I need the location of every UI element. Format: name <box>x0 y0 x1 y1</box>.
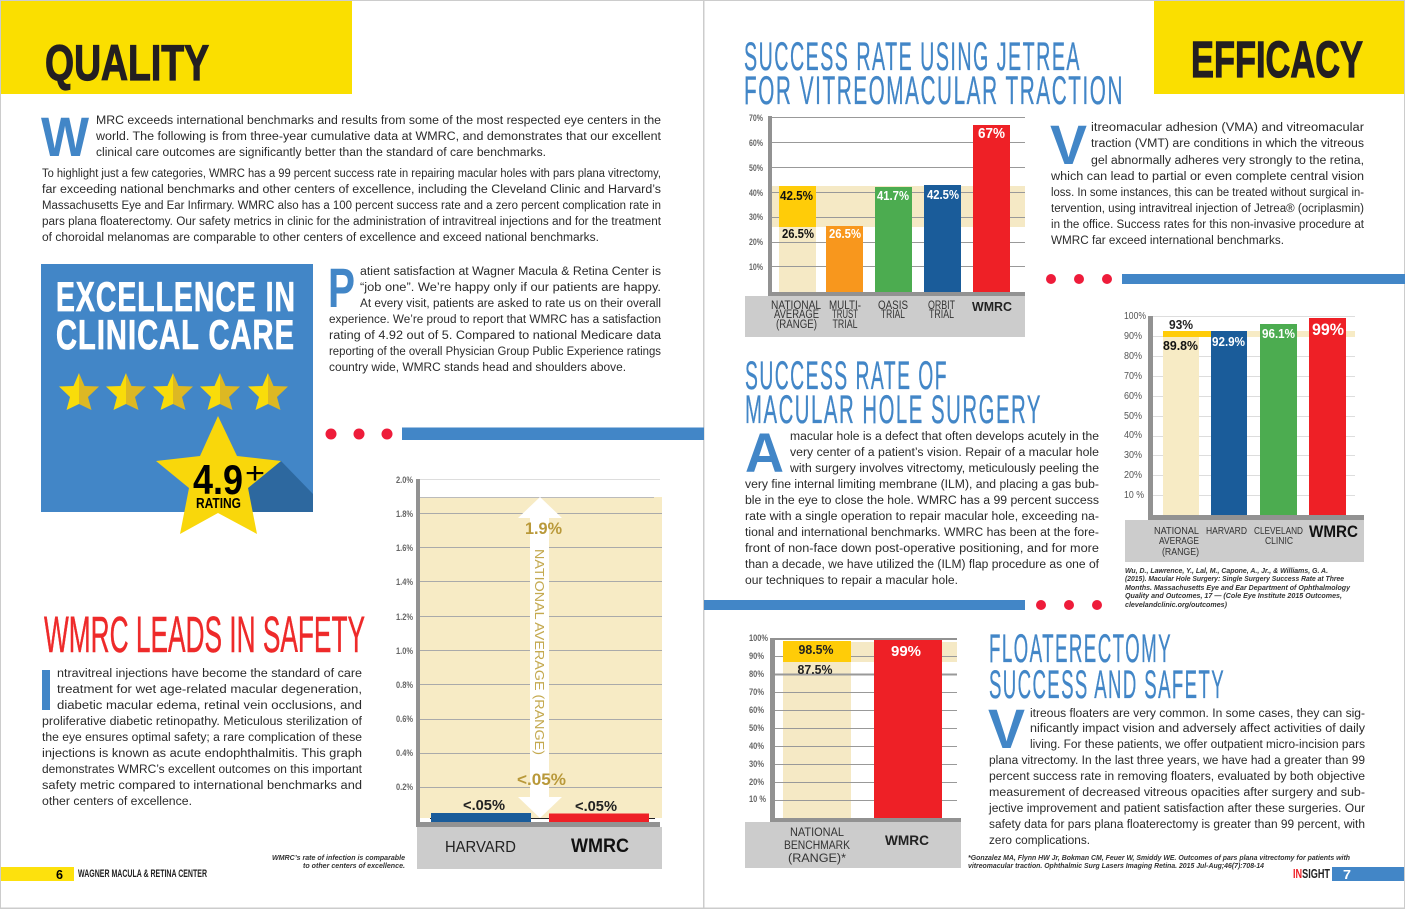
axis labels: 20% <box>1124 470 1142 481</box>
bar: wmrc: 99% <box>1312 320 1344 339</box>
category labels: CLINIC <box>1265 536 1293 547</box>
heading: success rate using jetrea <box>744 35 1124 113</box>
text block: macular hole: very center of a patient’s vision. Repair of a macular hole <box>790 447 1099 459</box>
bar chart: safety: NATIONAL AVERAGE (RANGE) <box>532 549 547 755</box>
references: macular hole: Wu, D., Lawrence, Y., Lal, M., Capone, A., Jr., & Williams, G. A. <box>1125 566 1328 575</box>
bar chart: safety: 1.9% <box>525 519 562 538</box>
text block: safety: safety metric compared to international benchmarks and <box>42 780 362 792</box>
axis labels: 60% <box>749 138 763 148</box>
bar: wmrc <box>973 125 1010 292</box>
heading: floaterectomy success and safety: FLOATERECTOMY <box>989 627 1172 671</box>
text block: macular hole: macular hole is a defect that often develops acutely in the <box>790 431 1099 443</box>
arrow: national average range <box>518 497 562 818</box>
bar: wmrc <box>1309 318 1346 515</box>
axis labels: 60% <box>1124 391 1142 402</box>
axis labels: 10 % <box>1124 490 1144 501</box>
bar: national average range: 42.5% <box>780 189 813 203</box>
bar chart: safety <box>396 475 662 869</box>
icon: large rating star <box>156 416 281 534</box>
category labels: HARVARD <box>1206 526 1247 537</box>
heading: success rate of macular hole surgery: SUCCESS RATE OF <box>745 354 948 398</box>
axis labels: 0.4% <box>396 748 413 758</box>
bar: national benchmark range <box>783 641 851 677</box>
axis labels: 20% <box>749 777 764 787</box>
text block: patient satisfaction <box>328 256 662 374</box>
category labels: AVERAGE <box>1159 536 1199 547</box>
text block: quality intro <box>41 105 662 244</box>
axis labels: 40% <box>1124 430 1142 441</box>
footer: right page: 7 <box>1343 867 1351 882</box>
text block: floaterectomy: nificantly impact vision and adversely affect activities of daily <box>1030 723 1365 735</box>
bar: national average range <box>779 186 816 241</box>
text block: quality intro: To highlight just a few categories, WMRC has a 99 percent success rate in repairing macular holes with pars plana vitrectomy, <box>42 168 661 180</box>
bar: wmrc: 99% <box>891 643 921 660</box>
category labels <box>417 827 662 869</box>
icon: large rating star: RATING <box>196 495 241 512</box>
text block: macular hole <box>745 421 1100 587</box>
text block: quality intro: W <box>41 105 89 168</box>
footer: left page: WAGNER MACULA & RETINA CENTER <box>78 868 207 880</box>
text block: quality intro: of choroidal melanomas are comparable to other centers of excellence and exceed national benchmarks. <box>42 232 599 244</box>
category labels: (RANGE) <box>776 319 817 331</box>
axis labels: 0.2% <box>396 782 413 792</box>
axis labels: 1.6% <box>396 543 413 553</box>
bar: wmrc <box>549 814 649 822</box>
axis labels: 70% <box>749 687 764 697</box>
category labels: WMRC <box>972 299 1013 314</box>
axis labels: 40% <box>749 188 763 198</box>
text block: patient satisfaction: atient satisfaction at Wagner Macula & Retina Center is <box>360 266 661 278</box>
footnote: infection rate <box>272 853 405 870</box>
category labels: TRUST <box>832 309 858 321</box>
bar: multi-trust trial: 26.5% <box>829 227 861 241</box>
bar chart: safety: <.05% <box>517 770 566 789</box>
icon: star shadow <box>248 461 313 512</box>
banner: efficacy <box>1154 1 1404 94</box>
axis labels: 30% <box>749 212 763 222</box>
icon: large rating star: 4.9 <box>193 456 243 503</box>
text block: floaterectomy: plana vitrectomy. In the last three years, we have had a greater than 99 <box>989 755 1365 767</box>
references: macular hole <box>1125 566 1351 609</box>
text block: floaterectomy: itreous floaters are very common. In some cases, they can sig- <box>1030 708 1365 720</box>
text block: macular hole: with surgery involves vitrectomy, meticulously peeling the <box>789 463 1099 475</box>
category labels: WMRC <box>1309 523 1358 541</box>
text block: safety: other centers of excellence. <box>42 796 192 808</box>
axis labels: 100% <box>1124 311 1146 322</box>
category labels: (RANGE)* <box>788 853 847 865</box>
category labels <box>1125 520 1364 562</box>
axis labels: 20% <box>749 237 763 247</box>
category labels: OASIS <box>878 300 908 312</box>
references: macular hole: Months. Massachusetts Eye and Ear Department of Ophthalmology <box>1125 583 1351 592</box>
footnote: floaterectomy reference: vitreomacular traction. Ophthalmic Surg Lasers Imaging Retina. 2015 Jul-Aug;46(7):708-14 <box>968 861 1265 870</box>
bar chart: safety: <.05% <box>463 797 505 814</box>
category labels: NATIONAL <box>790 827 845 839</box>
text block: safety <box>42 668 363 808</box>
bar chart: macular hole surgery <box>1124 311 1364 562</box>
axis labels: 0.6% <box>396 714 413 724</box>
footer: left page <box>1 867 207 882</box>
text block: quality intro: world. The following is from three-year cumulative data at WMRC, and demonstrates that our excellent <box>95 131 662 143</box>
bar: harvard <box>431 813 531 822</box>
bar: wmrc <box>874 640 942 818</box>
heading: excellence in clinical care <box>56 273 296 358</box>
text block: vitreomacular traction: V <box>1050 113 1087 176</box>
text block: floaterectomy: percent success rate in removing floaters, evaluated by both objective <box>989 771 1365 783</box>
text block: patient satisfaction: At every visit, patients are asked to rate us on their overall <box>360 298 661 310</box>
text block: patient satisfaction: rating of 4.92 out of 5. Compared to national Medicare data <box>329 330 662 342</box>
footer: left page: 6 <box>56 867 63 882</box>
axis labels: 100% <box>749 633 768 643</box>
category labels: CLEVELAND <box>1254 526 1303 537</box>
icon: large rating star: + <box>245 457 265 490</box>
bar: oasis trial <box>875 187 912 292</box>
axis labels: 50% <box>749 163 763 173</box>
axis labels: 50% <box>749 723 764 733</box>
axis labels: 1.0% <box>396 646 413 656</box>
bar: orbit trial: 42.5% <box>927 188 959 202</box>
panel: excellence in clinical care <box>41 264 313 534</box>
text block: patient satisfaction: experience. We’re proud to report that WMRC has a satisfaction <box>329 314 661 326</box>
heading: success rate of macular hole surgery <box>745 354 1042 432</box>
footnote: infection rate: WMRC’s rate of infection is comparable <box>272 853 405 862</box>
text block: macular hole: front of non-face down post-operative positioning, and for more <box>745 543 1099 555</box>
axis labels: 60% <box>749 705 764 715</box>
axis labels <box>1124 311 1146 501</box>
bar: multi-trust trial <box>826 226 863 292</box>
bar: cleveland clinic: 96.1% <box>1262 327 1295 341</box>
text block: macular hole: tional and international benchmarks. WMRC has been at the fore- <box>745 527 1099 539</box>
text block: macular hole: A <box>745 421 784 484</box>
bar chart: safety: <.05% <box>575 798 617 815</box>
axis labels: 70% <box>749 113 763 123</box>
text block: vitreomacular traction <box>1050 113 1365 247</box>
text block: vitreomacular traction: traction (VMT) are conditions in which the vitreous <box>1091 138 1364 150</box>
references: macular hole: Quality and Outcomes, 17 — (Cole Eye Institute 2015 Outcomes, <box>1125 591 1342 600</box>
axis labels: 70% <box>1124 371 1142 382</box>
category labels: BENCHMARK <box>784 840 850 852</box>
axis labels: 1.4% <box>396 577 413 587</box>
text block: floaterectomy: jective improvement and patient satisfaction after these surgeries. Our <box>988 803 1365 815</box>
category labels: (RANGE) <box>1162 547 1199 558</box>
text block: macular hole: rate with a single operation to repair macular hole, exceeding na- <box>745 511 1099 523</box>
bar: national average range: 89.8% <box>1163 339 1198 353</box>
references: macular hole: clevelandclinic.org/outcomes) <box>1125 600 1227 609</box>
axis labels: 30% <box>749 759 764 769</box>
text block: safety: injections is known as acute endophthalmitis. This graph <box>42 748 362 760</box>
text block: vitreomacular traction: which can lead to partial or even complete central vision <box>1050 171 1364 183</box>
bar: national average range <box>1163 318 1211 353</box>
axis labels: 2.0% <box>396 475 413 485</box>
category labels <box>745 296 1025 337</box>
text block: vitreomacular traction: loss. In some instances, this can be treated without surgical in- <box>1051 187 1364 199</box>
axis labels: 80% <box>1124 351 1142 362</box>
axis labels <box>749 633 768 804</box>
text block: macular hole: very fine internal limiting membrane (ILM), and placing a gas bub- <box>745 479 1099 491</box>
category labels: WMRC <box>571 836 629 857</box>
bar: harvard: 92.9% <box>1212 335 1245 349</box>
category labels: ORBIT <box>928 300 955 312</box>
text block: vitreomacular traction: WMRC far exceed international benchmarks. <box>1051 235 1284 247</box>
text block: patient satisfaction: reporting of the overall Physician Group Public Experience ratings <box>329 346 661 358</box>
text block: quality intro: Massachusetts Eye and Ear Infirmary. WMRC also has a 100 percent success rate and a zero percent complication rate in <box>42 200 661 212</box>
bar: oasis trial: 41.7% <box>877 189 909 203</box>
text block: floaterectomy <box>988 697 1365 847</box>
axis labels: 1.2% <box>396 612 413 622</box>
text block: safety: diabetic macular edema, retinal vein occlusions, and <box>57 700 362 712</box>
footer: right page <box>1293 866 1404 882</box>
text block: macular hole: ble in the eye to close the hole. WMRC has a 99 percent success <box>745 495 1099 507</box>
axis labels: 40% <box>749 741 764 751</box>
axis labels <box>749 113 763 272</box>
text block: vitreomacular traction: itreomacular adhesion (VMA) and vitreomacular <box>1091 122 1364 134</box>
text block: quality intro: clinical care outcomes are significantly better than the standard of care benchmarks. <box>96 147 546 159</box>
text block: patient satisfaction: country wide, WMRC stands head and shoulders above. <box>329 362 626 374</box>
bar chart: jetrea success rate <box>745 113 1025 337</box>
footer: right page: INSIGHT <box>1293 866 1330 881</box>
axis labels: 0.8% <box>396 680 413 690</box>
axis labels <box>396 475 413 792</box>
footnote: floaterectomy reference <box>968 853 1350 870</box>
category labels: TRIAL <box>929 309 954 321</box>
text block: vitreomacular traction: gel abnormally adheres very strongly to the retina, <box>1091 155 1364 167</box>
axis labels: 1.8% <box>396 509 413 519</box>
text block: macular hole: than a decade, we have utilized the (ILM) flap procedure as one of <box>745 559 1100 571</box>
bar chart: floaterectomy <box>745 633 961 868</box>
heading: floaterectomy success and safety <box>989 627 1225 707</box>
text block: vitreomacular traction: tervention, using intravitreal injection of Jetrea® (ocriplasmin) <box>1051 203 1364 215</box>
axis labels: 90% <box>749 651 764 661</box>
text block: safety: ntravitreal injections have become the standard of care <box>57 668 362 680</box>
category labels: HARVARD <box>445 839 516 856</box>
text block: floaterectomy: measurement of decreased vitreous opacities after surgery and sub- <box>989 787 1365 799</box>
text block: quality intro: far exceeding national benchmarks and other centers of excellence, including the Cleveland Clinic and Harvard’s <box>42 184 661 196</box>
text block: patient satisfaction: “job one”. We’re happy only if our patients are happy. <box>360 282 661 294</box>
bar: national benchmark range: 87.5% <box>798 662 833 677</box>
text block: patient satisfaction: P <box>328 256 355 319</box>
bar: wmrc: 67% <box>978 126 1005 142</box>
axis labels: 30% <box>1124 450 1142 461</box>
category labels: NATIONAL <box>771 300 822 312</box>
category labels: AVERAGE <box>774 309 819 321</box>
text block: safety: proliferative diabetic retinopathy. Meticulous sterilization of <box>42 716 363 728</box>
banner: quality: QUALITY <box>45 35 209 91</box>
bar: national average range: 26.5% <box>782 227 814 241</box>
text block: quality intro: MRC exceeds international benchmarks and results from some of the most respected eye centers in the <box>96 115 661 127</box>
category labels: NATIONAL <box>1154 526 1199 537</box>
bar: national average range: 93% <box>1169 318 1193 332</box>
category labels <box>745 822 961 868</box>
text block: safety: treatment for wet age-related macular degeneration, <box>57 684 362 696</box>
text block: safety: the eye ensures optimal safety; a rare complication of these <box>42 732 362 744</box>
axis labels: 50% <box>1124 411 1142 422</box>
text block: floaterectomy: living. For these patients, we offer outpatient micro-incision pars <box>1030 739 1365 751</box>
axis labels: 80% <box>749 669 764 679</box>
footnote: floaterectomy reference: *Gonzalez MA, Flynn HW Jr, Bokman CM, Feuer W, Smiddy WE. Outcomes of pars plana vitrectomy for patients with <box>968 853 1350 862</box>
icon: five rating stars <box>59 373 288 410</box>
category labels: TRIAL <box>881 309 905 321</box>
category labels: MULTI- <box>829 300 861 312</box>
text block: vitreomacular traction: in the office. Success rates for this non-invasive procedure at <box>1051 219 1365 231</box>
footnote: infection rate: to other centers of excellence. <box>303 861 405 870</box>
heading: success rate of macular hole surgery: MACULAR HOLE SURGERY <box>745 388 1042 432</box>
bar: cleveland clinic <box>1260 324 1297 515</box>
bar: national benchmark range: 98.5% <box>798 642 834 657</box>
axis labels: 10% <box>749 262 763 272</box>
category labels: WMRC <box>885 832 929 848</box>
text block: floaterectomy: zero complications. <box>989 835 1090 847</box>
references: macular hole: (2015). Macular Hole Surgery: Single Surgery Success Rate at Three <box>1125 574 1344 583</box>
text block: quality intro: pars plana floaterectomy. Our safety metrics in clinic for the administration of intravitreal injections and for the treatment <box>42 216 662 228</box>
heading: wmrc leads in safety: WMRC LEADS IN SAFETY <box>44 606 365 663</box>
text block: safety: demonstrates WMRC’s excellent outcomes on this important <box>42 764 363 776</box>
category labels: TRIAL <box>832 319 858 331</box>
banner: quality <box>1 1 352 94</box>
text block: macular hole: our techniques to repair a macular hole. <box>745 575 958 587</box>
bar: orbit trial <box>924 185 961 292</box>
text block: floaterectomy: safety data for pars plana floaterectomy is greater than 99 percent, with <box>989 819 1365 831</box>
text block: floaterectomy: V <box>988 697 1025 760</box>
heading: excellence in clinical care: EXCELLENCE IN <box>56 273 296 320</box>
bar: harvard <box>1211 331 1247 515</box>
heading: excellence in clinical care: CLINICAL CARE <box>56 311 295 358</box>
axis labels: 90% <box>1124 331 1142 342</box>
axis labels: 10 % <box>749 794 766 804</box>
